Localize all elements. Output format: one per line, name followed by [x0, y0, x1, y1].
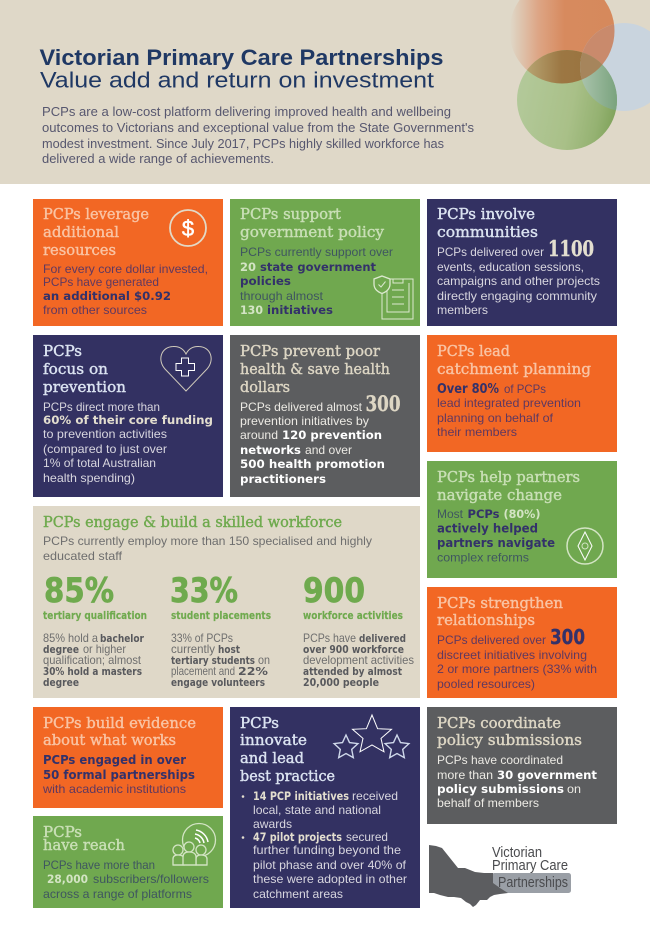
- stat: 900 workforce activities: delivered: [359, 633, 406, 645]
- text: government policy body: [240, 245, 393, 317]
- heading: leverage: PCPs leverage: [43, 205, 149, 223]
- text: prevention body: to prevention activities: [43, 427, 167, 441]
- heading: best practice: PCPs: [240, 714, 279, 732]
- list: achievements: catchment areas: [253, 887, 343, 901]
- panel: involve communities: [427, 199, 617, 326]
- title: Value add and return on investment: [40, 68, 434, 92]
- intro paragraph: modest investment. Since July 2017, PCPs highly skilled workforce has: [42, 137, 444, 151]
- list: achievements: local, state and national: [253, 803, 381, 817]
- text: workforce intro: educated staff: [43, 549, 123, 563]
- text: policy submissions body: 30 government: [497, 768, 598, 782]
- stat: 33% student placements: currently: [171, 642, 215, 656]
- heading: catchment planning: PCPs lead: [437, 342, 510, 360]
- icon: clipboard and shield: [374, 276, 413, 319]
- logo: Victorian Primary Care Partnerships: Primary Care: [492, 858, 568, 874]
- text: health dollars body: 120 prevention: [282, 428, 382, 442]
- text: government policy body: policies: [240, 274, 291, 288]
- stat: 33% student placements: placement and: [171, 664, 235, 678]
- panel: strengthen relationships: [427, 587, 617, 698]
- intro paragraph: delivered a wide range of achievements.: [42, 152, 274, 166]
- text: relationships body: 2 or more partners (33% with: [437, 662, 597, 676]
- text: leverage body: an additional $0.92: [43, 289, 171, 303]
- stat: 900 workforce activities: 20,000 people: [303, 677, 379, 689]
- stat: 33% student placements: student placements: [171, 610, 271, 622]
- stat: 33% student placements: on: [258, 653, 270, 667]
- text: government policy body: initiatives: [267, 303, 333, 317]
- heading: health dollars: PCPs prevent poor: [240, 342, 381, 360]
- list: achievements: these were adopted in other: [253, 872, 407, 886]
- text: navigate body: actively helped: [437, 520, 538, 536]
- stat: 85% tertiary qualification: qualification; almost: [43, 653, 142, 667]
- text: catchment body: planning on behalf of: [437, 411, 554, 425]
- heading: evidence: PCPs build evidence: [43, 714, 196, 732]
- text: government policy body: through almost: [240, 289, 324, 303]
- text: navigate body: [437, 507, 555, 564]
- heading: catchment planning: catchment planning: [437, 360, 591, 378]
- panel: have reach: [33, 816, 223, 908]
- logo: Victorian Primary Care Partnerships: Victorian: [492, 845, 542, 861]
- heading: best practice: innovate: [240, 731, 307, 749]
- text: reach body: PCPs have more than: [43, 858, 155, 872]
- text: health dollars body: practitioners: [240, 472, 326, 486]
- text: evidence body: PCPs engaged in over: [43, 752, 187, 767]
- heading: communities: communities: [437, 223, 538, 241]
- text: health dollars body: 300: [366, 391, 400, 416]
- heading: best practice: and lead: [240, 749, 304, 767]
- heading: leverage: resources: [43, 241, 116, 259]
- logo: Victorian Primary Care Partnerships: [429, 845, 571, 907]
- heading: prevention: focus on: [43, 360, 108, 378]
- text: evidence body: 50 formal partnerships: [43, 767, 195, 782]
- text: health dollars body: 500 health promotion: [240, 457, 385, 471]
- intro paragraph: outcomes to Victorians and exceptional value from the State Government's: [42, 121, 474, 135]
- heading: catchment planning: [437, 342, 591, 378]
- panel: support government policy: [230, 199, 420, 326]
- heading: navigate change: PCPs help partners: [437, 468, 580, 486]
- panel: help partners navigate change: [427, 461, 617, 578]
- stat: 900 workforce activities: 900: [303, 571, 365, 611]
- icon: heart with cross: [161, 346, 211, 391]
- list: achievements: 14 PCP initiatives: [253, 789, 349, 803]
- stat: 900 workforce activities: [303, 571, 414, 689]
- panel: focus on prevention: [33, 335, 223, 497]
- stat: 85% tertiary qualification: 85% hold a: [43, 631, 98, 645]
- text: policy submissions body: more than: [437, 768, 493, 782]
- icon: dollar coin: [170, 210, 206, 246]
- intro paragraph: PCPs are a low-cost platform delivering improved health and wellbeing: [42, 105, 451, 119]
- heading: workforce: PCPs engage & build a skilled workforce: [43, 513, 342, 531]
- text: workforce intro: [43, 534, 372, 563]
- text: health dollars body: around: [240, 428, 278, 442]
- list: achievements: awards: [253, 817, 292, 831]
- heading: best practice: best practice: [240, 767, 335, 785]
- text: prevention body: 60% of their core funding: [43, 413, 213, 427]
- text: prevention body: PCPs direct more than: [43, 400, 160, 414]
- text: catchment body: Over 80%: [437, 382, 499, 397]
- text: communities body: members: [437, 303, 488, 317]
- heading: relationships: [437, 594, 563, 629]
- stat: 33% student placements: engage volunteers: [171, 677, 265, 689]
- icon: compass: [567, 528, 603, 564]
- text: government policy body: 130: [240, 303, 263, 317]
- text: navigate body: Most: [437, 507, 464, 521]
- text: policy submissions body: behalf of members: [437, 796, 539, 810]
- list: achievements: [242, 789, 407, 901]
- heading: policy submissions: [437, 714, 582, 749]
- stat: 85% tertiary qualification: [43, 571, 147, 689]
- text: evidence body: with academic institutions: [42, 782, 186, 796]
- text: health dollars body: PCPs delivered almost: [240, 400, 363, 414]
- text: catchment body: their members: [437, 425, 517, 439]
- text: government policy body: PCPs currently support over: [240, 245, 393, 259]
- text: workforce intro: PCPs currently employ more than 150 specialised and highly: [43, 534, 372, 548]
- icon: people with signal: [173, 824, 216, 865]
- text: reach body: subscribers/followers: [93, 872, 209, 886]
- heading: relationships: relationships: [437, 611, 535, 629]
- stat: 33% student placements: tertiary students: [171, 655, 255, 667]
- stat: 33% student placements: 22%: [238, 666, 269, 678]
- stat: 85% tertiary qualification: degree: [43, 644, 79, 656]
- text: relationships body: PCPs delivered over: [437, 633, 546, 647]
- text: policy submissions body: [437, 753, 598, 810]
- heading: health dollars: [240, 342, 390, 396]
- stat: 85% tertiary qualification: 30% hold a masters: [43, 666, 142, 678]
- heading: leverage: additional: [43, 223, 119, 241]
- text: relationships body: 300: [550, 625, 585, 649]
- icon: three stars: [334, 715, 409, 758]
- text: health dollars body: and over: [305, 443, 352, 457]
- heading: reach: [43, 823, 125, 854]
- text: reach body: 28,000: [47, 872, 88, 886]
- text: communities body: events, education sessions,: [437, 260, 584, 274]
- heading: best practice: [240, 714, 335, 785]
- heading: navigate change: [437, 468, 580, 504]
- heading: reach: PCPs: [43, 823, 82, 841]
- stat: 900 workforce activities: PCPs have: [303, 631, 356, 645]
- heading: communities: PCPs involve: [437, 205, 535, 223]
- heading: government policy: PCPs support: [240, 205, 341, 223]
- text: relationships body: pooled resources): [437, 677, 535, 691]
- list: achievements: further funding beyond the: [253, 843, 401, 857]
- heading: evidence: about what works: [43, 731, 176, 749]
- heading: communities: [437, 205, 538, 241]
- text: relationships body: [437, 625, 597, 691]
- stat: 33% student placements: 33%: [170, 571, 238, 611]
- text: prevention body: (compared to just over: [43, 442, 167, 456]
- stat: 900 workforce activities: workforce activities: [303, 610, 403, 622]
- stat: 85% tertiary qualification: or higher: [83, 642, 126, 656]
- list: achievements: received: [352, 789, 398, 803]
- text: communities body: campaigns and other projects: [437, 274, 600, 288]
- text: communities body: 1100: [548, 236, 594, 261]
- heading: navigate change: navigate change: [437, 486, 562, 504]
- stat: 900 workforce activities: development activities: [303, 653, 414, 667]
- text: leverage body: For every core dollar invested,: [43, 262, 208, 276]
- list: achievements: 47 pilot projects: [253, 830, 342, 844]
- heading: prevention: PCPs: [43, 342, 82, 360]
- text: prevention body: health spending): [43, 471, 135, 485]
- text: policy submissions body: PCPs have coordinated: [437, 753, 563, 767]
- heading: relationships: PCPs strengthen: [437, 594, 563, 612]
- heading: prevention: [43, 342, 126, 396]
- stat: 85% tertiary qualification: bachelor: [100, 633, 145, 645]
- text: health dollars body: [240, 391, 400, 486]
- text: leverage body: from other sources: [43, 303, 147, 317]
- heading: leverage: [43, 205, 149, 259]
- decorative overlapping circles: [510, 0, 650, 150]
- text: health dollars body: prevention initiatives by: [240, 414, 369, 428]
- text: navigate body: PCPs: [468, 507, 500, 521]
- stat: 85% tertiary qualification: 85%: [44, 571, 114, 611]
- stat: 900 workforce activities: over 900 workforce: [303, 644, 404, 656]
- text: communities body: PCPs delivered over: [437, 245, 544, 259]
- heading: prevention: prevention: [43, 378, 126, 396]
- panel: leverage additional resources: [33, 199, 223, 326]
- text: policy submissions body: policy submissions: [437, 782, 564, 796]
- stat: 900 workforce activities: attended by almost: [303, 666, 402, 678]
- text: communities body: [437, 236, 600, 317]
- title: Victorian Primary Care Partnerships: [40, 45, 444, 70]
- text: government policy body: 20: [240, 260, 256, 274]
- stat: 85% tertiary qualification: degree: [43, 677, 79, 689]
- panel: innovate and lead best practice: [230, 707, 420, 908]
- heading: evidence: [43, 714, 196, 749]
- panel: lead catchment planning: [427, 335, 617, 452]
- text: policy submissions body: on: [567, 782, 581, 796]
- heading: government policy: [240, 205, 385, 241]
- list: achievements: secured: [346, 830, 388, 844]
- text: navigate body: (80%): [504, 507, 540, 521]
- title: [40, 45, 444, 92]
- list: achievements: pilot phase and over 40% of: [253, 858, 407, 872]
- panel: skilled workforce: [33, 506, 420, 698]
- text: catchment body: of PCPs: [504, 382, 546, 396]
- text: catchment body: lead integrated prevention: [437, 396, 581, 410]
- heading: policy submissions: policy submissions: [437, 731, 582, 749]
- panel: prevent poor health: [230, 335, 420, 497]
- panel: build evidence: [33, 707, 223, 808]
- heading: health dollars: health & save health: [240, 360, 390, 378]
- logo: Victorian Primary Care Partnerships: Partnerships: [498, 875, 568, 891]
- text: prevention body: [43, 400, 213, 485]
- text: relationships body: discreet initiatives involving: [437, 648, 587, 662]
- icon: dollar coin: $: [182, 216, 194, 241]
- text: leverage body: PCPs have generated: [43, 275, 159, 289]
- heading: reach: have reach: [43, 836, 125, 854]
- stat: 33% student placements: host: [218, 644, 240, 656]
- text: reach body: across a range of platforms: [43, 887, 192, 901]
- heading: government policy: government policy: [240, 223, 385, 241]
- text: evidence body: [42, 752, 195, 796]
- text: communities body: directly engaging community: [437, 289, 597, 303]
- stat: 85% tertiary qualification: tertiary qualification: [43, 610, 147, 622]
- intro paragraph: [42, 105, 474, 166]
- heading: health dollars: dollars: [240, 378, 290, 396]
- text: navigate body: complex reforms: [437, 550, 529, 564]
- text: navigate body: partners navigate: [437, 535, 555, 550]
- text: leverage body: [43, 262, 208, 317]
- stat: 33% student placements: [170, 571, 271, 689]
- text: catchment body: [437, 382, 581, 439]
- stat: 33% student placements: 33% of PCPs: [171, 631, 233, 645]
- text: prevention body: 1% of total Australian: [43, 456, 156, 470]
- text: reach body: [43, 858, 209, 901]
- heading: policy submissions: PCPs coordinate: [437, 714, 561, 732]
- text: health dollars body: networks: [240, 443, 301, 457]
- panel: coordinate policy submissions: [427, 707, 617, 824]
- text: government policy body: state government: [260, 260, 376, 274]
- header band: [0, 0, 650, 184]
